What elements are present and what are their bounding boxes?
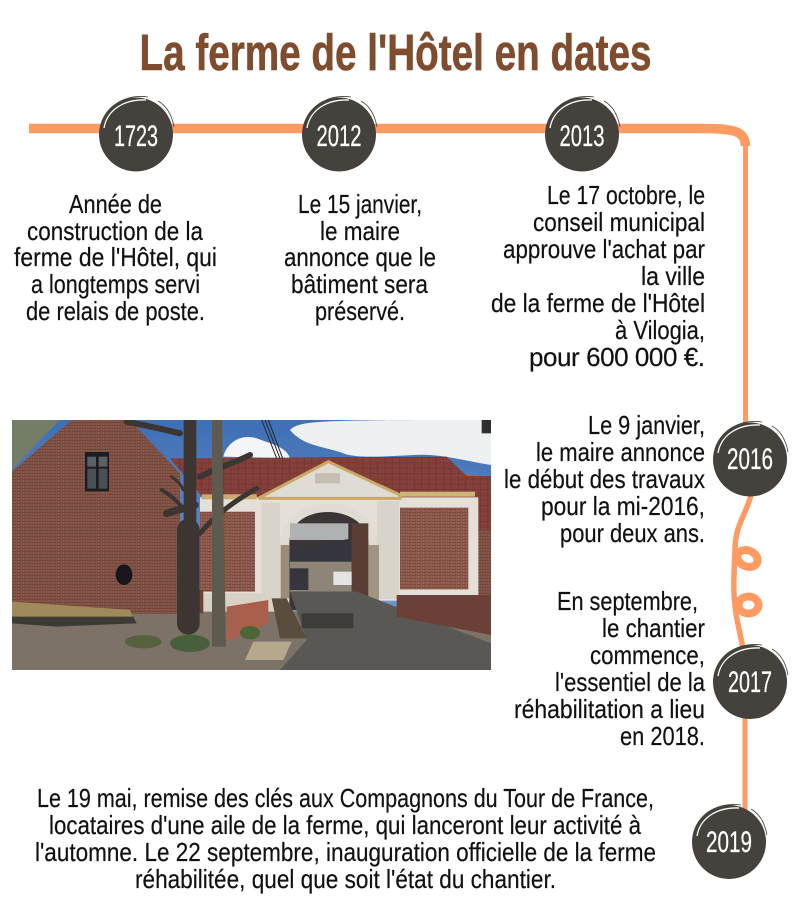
utility pole	[212, 420, 226, 647]
text: 2019	[35, 783, 656, 894]
text: 2013: Le 17 octobre, le	[547, 180, 705, 210]
year marker: 2016	[713, 421, 788, 496]
right low wall	[397, 595, 491, 635]
text: 2017: réhabilitation a lieu	[514, 694, 705, 724]
text: 2016: pour la mi-2016,	[541, 491, 705, 521]
text: 2013: de la ferme de l'Hôtel	[491, 288, 705, 318]
round window	[116, 564, 132, 585]
text: 1723: a longtemps servi	[31, 269, 200, 299]
right wall brick	[478, 530, 491, 595]
text: 1723: Année de	[69, 189, 162, 219]
pallet	[245, 642, 292, 660]
text: 2017: en 2018.	[620, 721, 705, 751]
text: 2016: pour deux ans.	[560, 518, 705, 548]
front low wall	[227, 600, 268, 642]
text: 2012: le maire	[320, 216, 400, 246]
pediment	[258, 462, 400, 498]
year marker: 2016: 2016	[727, 443, 773, 476]
text: 2012: préservé.	[315, 296, 405, 326]
vegetation	[125, 635, 162, 648]
text: 2013: conseil municipal	[533, 207, 705, 237]
window	[85, 452, 109, 491]
text: 2017: commence,	[590, 640, 705, 670]
year marker: 2013: 2013	[560, 120, 604, 153]
arch	[288, 600, 290, 604]
text: 1723	[14, 189, 217, 326]
tree	[127, 420, 257, 623]
wires	[262, 420, 283, 458]
text: 1723: de relais de poste.	[26, 296, 205, 326]
text: 2016: le début des travaux	[504, 464, 705, 494]
clouds	[290, 420, 491, 465]
text: 1723: ferme de l'Hôtel, qui	[14, 242, 217, 272]
text: 2017: l'essentiel de la	[555, 667, 705, 697]
text: 2012	[284, 189, 436, 326]
year marker: 2019: 2019	[706, 826, 752, 859]
lumber	[12, 602, 133, 618]
year marker: 2017	[713, 644, 788, 719]
year marker: 1723	[99, 96, 174, 172]
year marker: 2012	[302, 96, 377, 172]
photo: ferme de l'Hôtel	[12, 420, 491, 670]
text: 1723: construction de la	[27, 216, 203, 246]
text: 2017: le chantier	[602, 613, 705, 643]
text: 2013	[491, 180, 705, 372]
year marker: 2013	[545, 96, 620, 172]
tree background upper-left	[12, 420, 60, 470]
text: 2013: pour 600 000 €.	[529, 342, 705, 372]
text: 2019: Le 19 mai, remise des clés aux Compagnons du Tour de France,	[37, 783, 654, 813]
text: 2016	[504, 410, 705, 548]
text: 2013: à Vilogia,	[615, 315, 705, 345]
year marker: 2019	[692, 804, 767, 879]
text: 2017: En septembre,	[557, 586, 698, 616]
timeline line	[29, 128, 760, 815]
text: 2012: bâtiment sera	[291, 269, 428, 299]
text: 2019: l'automne. Le 22 septembre, inauguration officielle de la ferme	[35, 837, 656, 867]
text: 2019: locataires d'une aile de la ferme, qui lanceront leur activité à	[49, 810, 641, 840]
year marker: 2017: 2017	[728, 666, 772, 699]
year marker: 2012: 2012	[316, 120, 362, 153]
text: 2013: la ville	[641, 261, 705, 291]
text: 2019: réhabilitée, quel que soit l'état du chantier.	[135, 864, 556, 894]
left gable	[12, 420, 180, 614]
text: 2016: le maire annonce	[536, 437, 705, 467]
gate body	[200, 497, 478, 601]
year marker: 1723: 1723	[114, 120, 158, 153]
text: 2012: annonce que le	[284, 242, 436, 272]
ground	[12, 612, 491, 670]
title: La ferme de l'Hôtel en dates	[140, 24, 652, 81]
text: 2013: approuve l'achat par	[503, 234, 705, 264]
text: 2016: Le 9 janvier,	[588, 410, 705, 440]
text: 2017	[514, 586, 705, 751]
tile roof	[170, 457, 491, 530]
text: 2012: Le 15 janvier,	[298, 189, 422, 219]
